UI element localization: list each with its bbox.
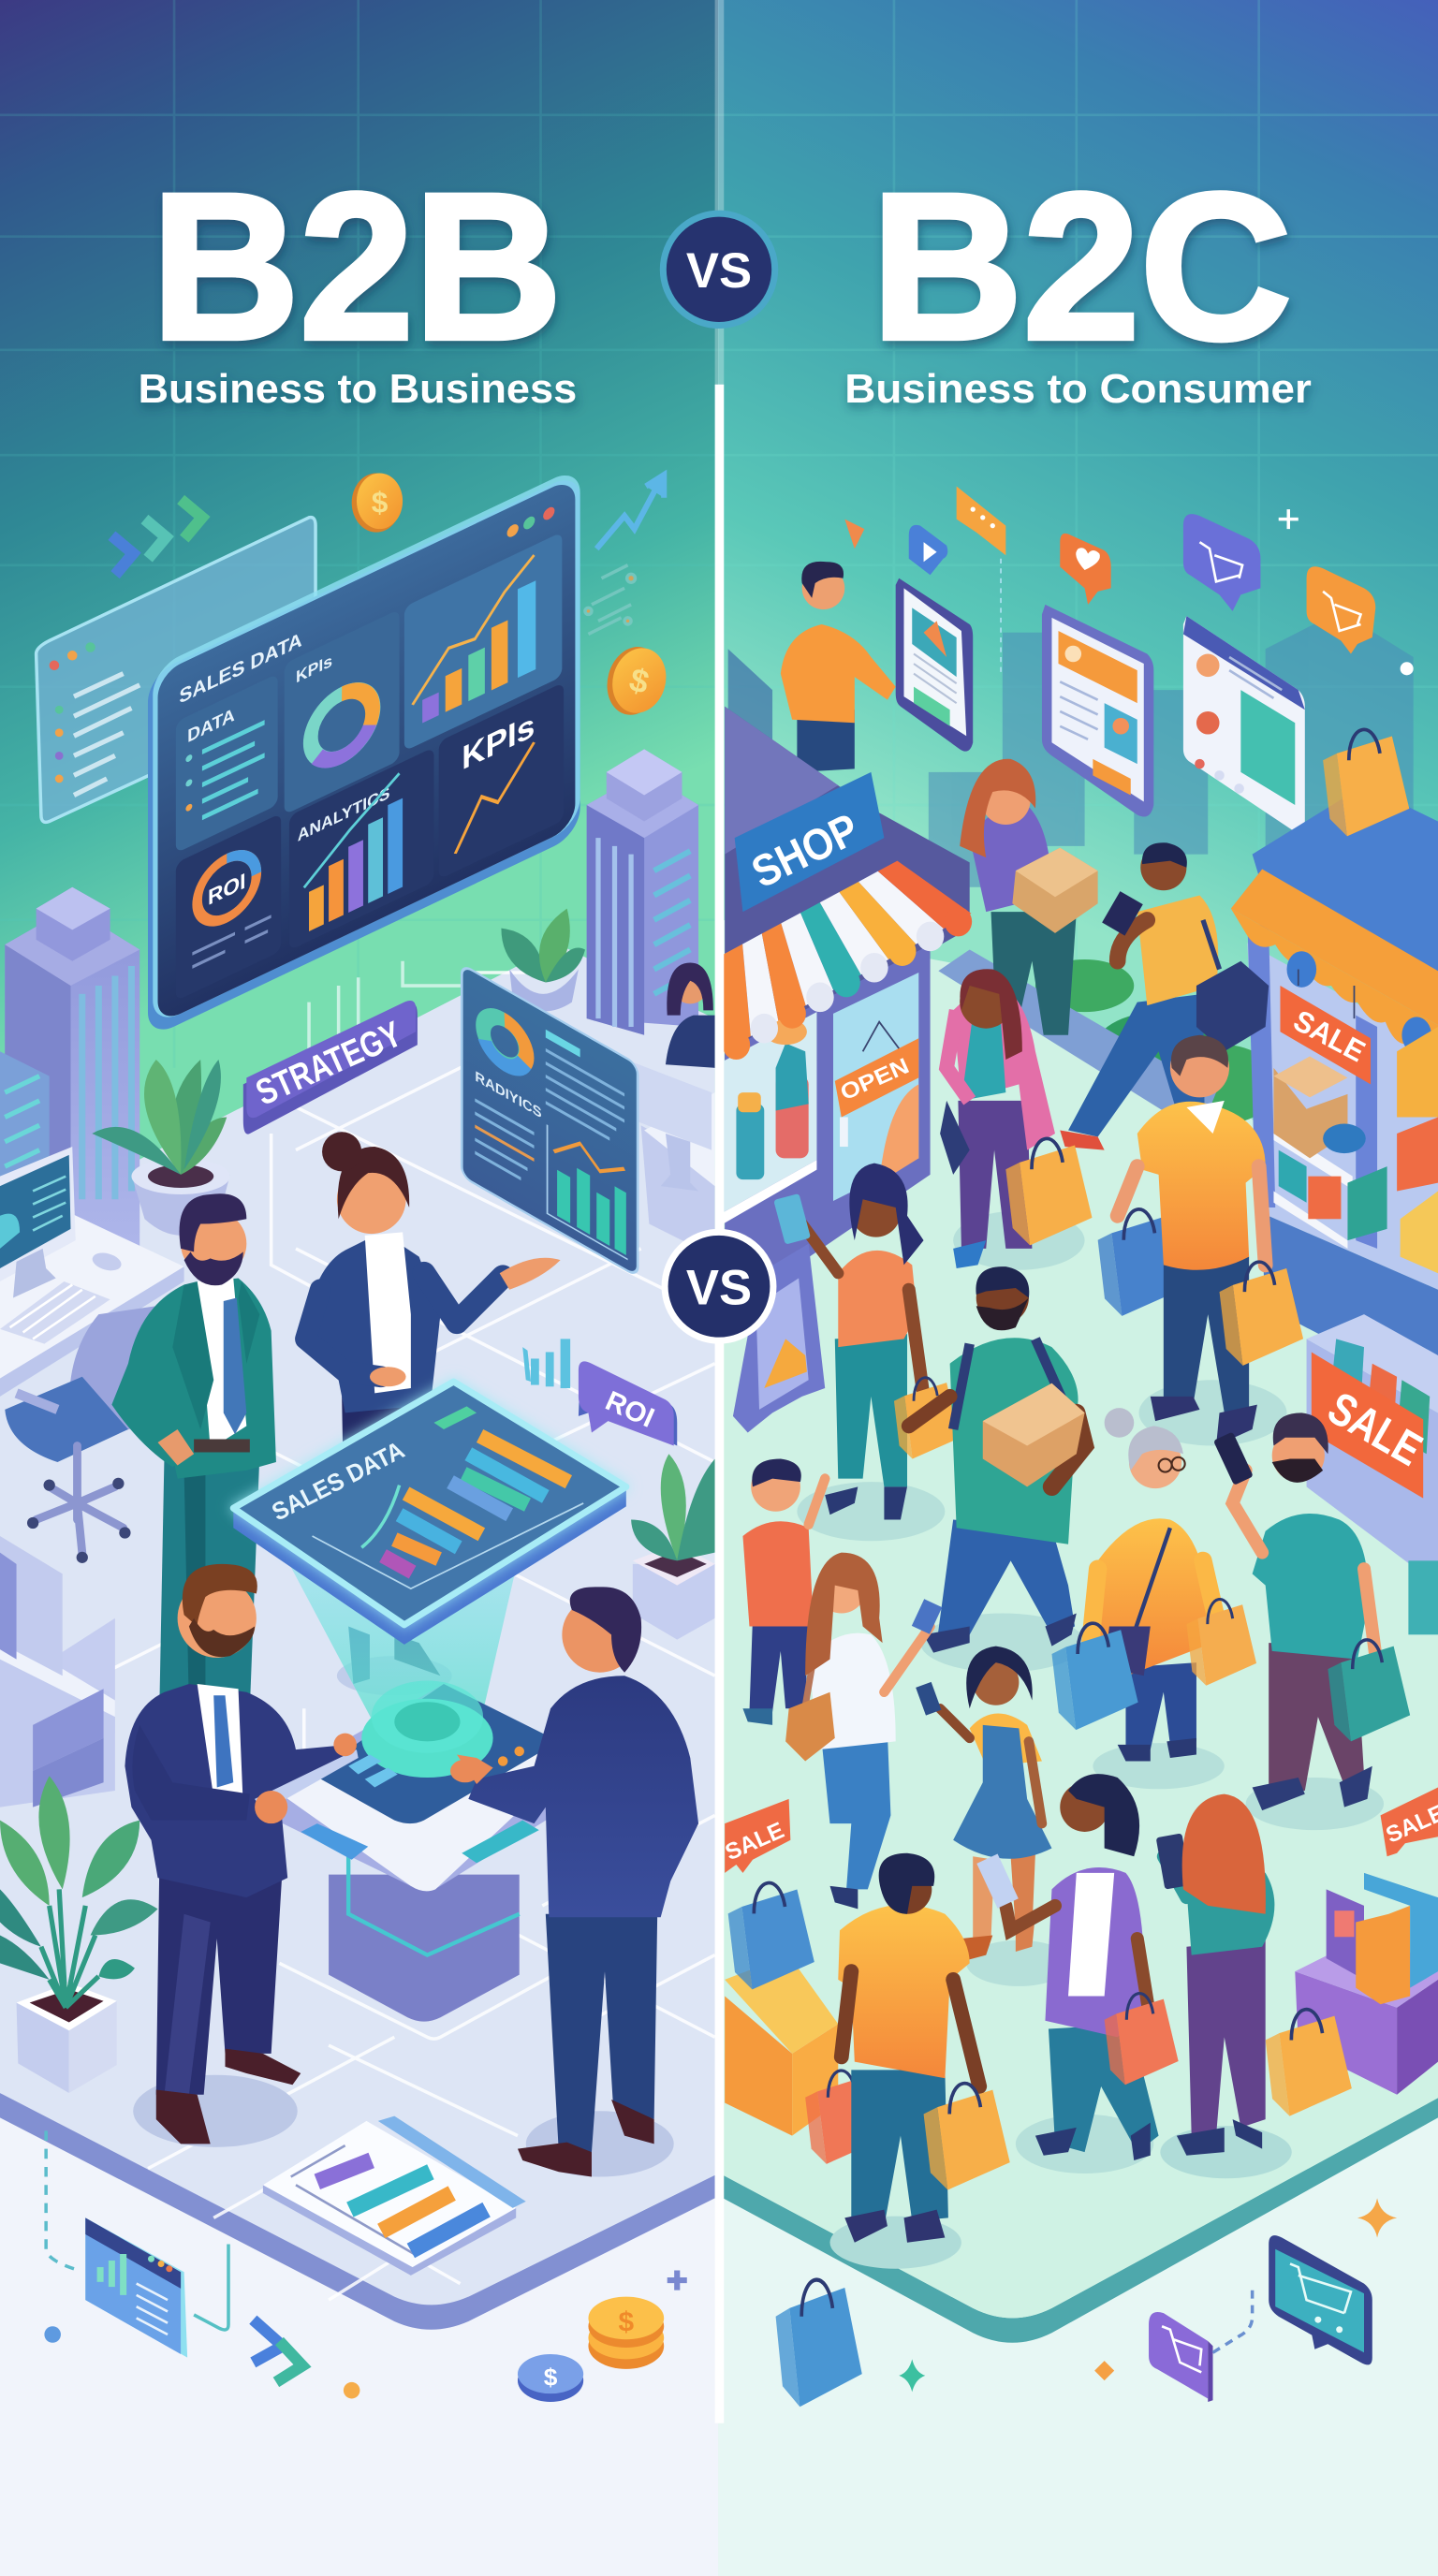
furniture: desk with monitor and keyboard bbox=[0, 1147, 184, 1397]
person: woman presenting bbox=[304, 1132, 561, 1695]
icon: orange diamond bbox=[1094, 2361, 1114, 2380]
person: woman in orange top bbox=[773, 1164, 960, 1541]
panel: door with OPEN sign bbox=[833, 973, 918, 1201]
icon: coin right: $ bbox=[625, 661, 653, 701]
panel: SHOP storefront bbox=[723, 707, 972, 1314]
icon: small data dots bbox=[585, 565, 635, 634]
chart: growth bars bbox=[404, 532, 562, 752]
heading: B2C title: B2C bbox=[871, 151, 1292, 384]
badge: lower VS: VS bbox=[686, 1261, 752, 1316]
panel: main dashboard bbox=[148, 466, 580, 1039]
person: man in yellow polo bbox=[1098, 1035, 1303, 1445]
icon: plant right bbox=[631, 1454, 715, 1640]
icon: coin stack: $ bbox=[619, 2306, 635, 2337]
icon: SALE tag left: SALE bbox=[722, 1818, 788, 1866]
label: SALE window sign bbox=[1280, 970, 1371, 1084]
chart: analytics bars: ANALYTICS bbox=[298, 783, 389, 845]
icon: striped awning bbox=[723, 861, 972, 1060]
icon: plus bbox=[668, 2271, 687, 2291]
panel: holographic sales table: SALES DATA bbox=[267, 1436, 409, 1527]
icon: growth arrow bbox=[596, 475, 664, 549]
panel: data list: DATA bbox=[187, 705, 235, 747]
panel: browser three bbox=[1183, 616, 1305, 831]
icon: coin top: $ bbox=[372, 486, 389, 520]
icon: dashed connector to cart bbox=[1213, 2287, 1253, 2352]
panel: B2B isometric floor bbox=[0, 944, 715, 2330]
badge: top VS: VS bbox=[686, 243, 752, 299]
panel: door with OPEN sign: OPEN bbox=[837, 1054, 913, 1105]
person: bearded man in teal bbox=[1213, 1412, 1410, 1830]
icon: coin stack bbox=[588, 2297, 664, 2369]
person: red-haired woman from back bbox=[1156, 1794, 1292, 2178]
icon: purple crate with products bbox=[1295, 1873, 1438, 2095]
panel: ROI ring: ROI bbox=[208, 869, 246, 911]
divider: centre line bbox=[715, 0, 724, 2423]
person: man with orange sweater bbox=[781, 562, 896, 772]
icon: keyboard bbox=[0, 1281, 110, 1344]
chart: analytics bars bbox=[289, 747, 433, 950]
icon: blue coin: $ bbox=[544, 2363, 558, 2391]
panel: holographic sales table bbox=[233, 1382, 626, 1645]
icon: cart monitor bbox=[1269, 2235, 1372, 2364]
text: B2B subtitle: Business to Business bbox=[138, 366, 577, 412]
icon: mini window bbox=[85, 2217, 187, 2358]
person: man with parcel bbox=[909, 1266, 1085, 1673]
icon: orange bag by crate bbox=[1266, 2010, 1352, 2116]
furniture: office chair bbox=[5, 1306, 156, 1563]
scene: city behind B2C bbox=[728, 611, 1414, 1134]
icon: coin right bbox=[600, 641, 673, 723]
badge: top VS bbox=[663, 213, 775, 326]
icon: teal connector bbox=[194, 2244, 228, 2330]
person: man with phone and satchel bbox=[1060, 842, 1269, 1150]
person: man in orange shirt from back bbox=[805, 1853, 1010, 2269]
icon: bag on store roof bbox=[1323, 729, 1409, 836]
icon: floating social tiles bbox=[844, 487, 1414, 675]
person: woman with boxes bbox=[960, 759, 1098, 1051]
icon: dashed connector bbox=[46, 2130, 74, 2269]
icon: decorative dots bbox=[44, 2326, 360, 2398]
heading: B2B title: B2B bbox=[151, 151, 562, 384]
panel: phone two bbox=[1042, 605, 1153, 817]
icon: SALE tag left bbox=[722, 1799, 790, 1873]
label: STRATEGY tag: STRATEGY bbox=[250, 1014, 408, 1114]
icon: mini bars bbox=[522, 1339, 570, 1388]
text: sales data label: SALES DATA bbox=[179, 628, 302, 709]
icon: plant left bbox=[92, 1060, 230, 1236]
person: older woman in yellow bbox=[1051, 1408, 1256, 1789]
panel: back dashboard window bbox=[37, 518, 315, 822]
icon: purple cart tile bbox=[1149, 2312, 1213, 2402]
panel: floating analytics: RADIYICS bbox=[475, 1068, 542, 1122]
panel: right store bbox=[1231, 785, 1438, 1397]
icon: monitor bbox=[0, 1147, 76, 1298]
person: girl in overalls bbox=[916, 1647, 1072, 1986]
icon: SALE tag right bbox=[1381, 1788, 1438, 1856]
label: ROI bubble bbox=[579, 1361, 677, 1445]
panel: KPIs line chart bbox=[439, 682, 564, 880]
panel: B2C background bbox=[718, 0, 1438, 2576]
person: man with tablet bbox=[125, 1564, 359, 2147]
panel: KPIs donut bbox=[285, 609, 400, 815]
label: SALE window sign: SALE bbox=[1288, 1003, 1371, 1068]
person: child in orange shirt bbox=[742, 1459, 825, 1725]
label: SHOP sign: SHOP bbox=[744, 804, 867, 898]
icon: plant by panel bbox=[501, 909, 585, 1011]
panel: data list bbox=[176, 673, 278, 854]
icon: plant front left bbox=[0, 1776, 158, 2093]
panel: phone one bbox=[896, 578, 973, 752]
building: left tower bbox=[0, 887, 139, 1249]
icon: orange sparkle bbox=[1357, 2198, 1397, 2237]
label: SHOP sign bbox=[735, 772, 884, 912]
furniture: right desk and monitor bbox=[626, 1060, 715, 1257]
label: ROI bubble: ROI bbox=[601, 1385, 659, 1434]
panel: B2B background bbox=[0, 0, 718, 2576]
icon: blue coin bbox=[518, 2354, 583, 2402]
person: woman in pink cardigan bbox=[940, 969, 1092, 1270]
panel: SALE booth bbox=[1307, 1314, 1438, 1634]
chart: paper on floor bbox=[263, 2116, 526, 2276]
panel: B2C isometric floor bbox=[723, 920, 1438, 2343]
chart: hologram beam bbox=[287, 1560, 518, 1725]
person: man in teal suit bbox=[111, 1193, 276, 1708]
icon: orange crate with blue bag bbox=[725, 1882, 838, 2136]
furniture: lower desk with drawers bbox=[0, 1536, 115, 1808]
badge: lower VS bbox=[665, 1232, 773, 1340]
icon: teal sparkle bbox=[899, 2359, 925, 2392]
panel: console and pedestal bbox=[271, 1680, 567, 2022]
icon: chevrons bottom bbox=[253, 2320, 302, 2382]
icon: bottom blue bag bbox=[776, 2280, 862, 2407]
icon: coin top bbox=[352, 473, 403, 533]
building: right tower bbox=[587, 749, 698, 1035]
person: back woman at desk bbox=[666, 962, 715, 1068]
person: woman in white top bbox=[785, 1553, 942, 1909]
person: woman in purple cardigan bbox=[976, 1774, 1179, 2174]
person: man from back bbox=[450, 1587, 698, 2177]
panel: floating analytics bbox=[462, 964, 638, 1277]
panel: KPIs donut: KPIs bbox=[296, 651, 332, 686]
panel: KPIs line chart: KPIs bbox=[462, 705, 535, 777]
panel: window bbox=[723, 1012, 816, 1224]
icon: shelf items bbox=[1273, 1027, 1438, 1273]
lines: connectors below dashboard bbox=[309, 961, 463, 1068]
icon: store awning bbox=[1231, 869, 1438, 1053]
icon: chevrons top left bbox=[111, 498, 204, 575]
text: B2C subtitle: Business to Consumer bbox=[844, 366, 1312, 412]
panel: ROI ring bbox=[176, 813, 281, 1001]
icon: A-frame sign bbox=[733, 1244, 825, 1432]
